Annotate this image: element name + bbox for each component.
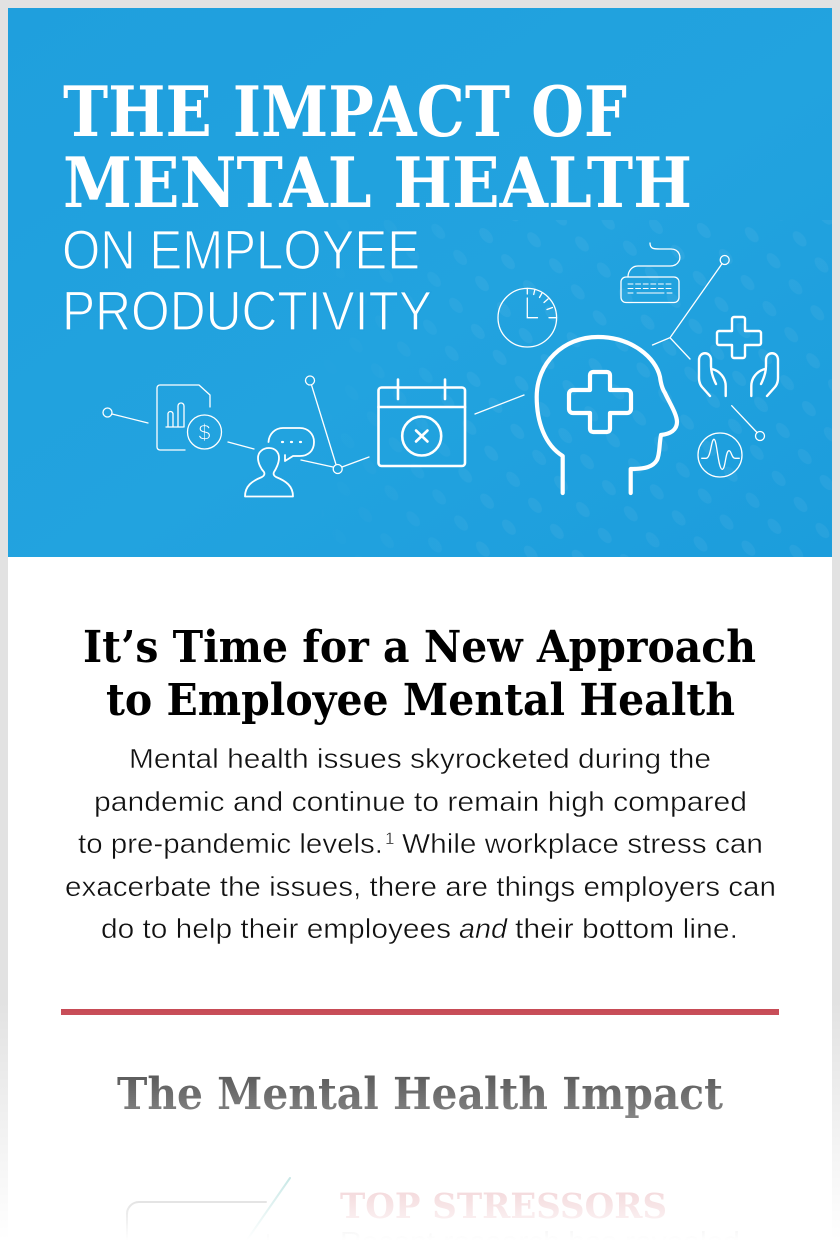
subtitle <box>62 218 432 342</box>
heading: new approach <box>83 622 756 726</box>
intro paragraph <box>65 743 776 944</box>
intro paragraph: While workplace stress can <box>402 828 763 859</box>
red divider <box>61 1009 779 1015</box>
top stressors icon <box>127 1178 290 1260</box>
connector lines and nodes, right <box>652 256 764 440</box>
heading: new approach: It’s Time for a New Approach <box>83 622 756 673</box>
subtitle: ON EMPLOYEE <box>62 218 420 281</box>
icon: document with chart and dollar coin: $ <box>198 420 211 445</box>
intro paragraph: their bottom line. <box>515 913 738 944</box>
icon: pulse in circle <box>698 433 742 477</box>
icon: clock <box>498 288 557 347</box>
header banner <box>8 8 832 557</box>
subtitle: PRODUCTIVITY <box>62 279 432 342</box>
top stressors heading: TOP STRESSORS <box>340 1186 667 1227</box>
icon: document with chart and dollar coin <box>157 385 222 450</box>
white fade overlay <box>0 1000 840 1240</box>
intro paragraph: do to help their employees <box>101 913 451 944</box>
icon: keyboard <box>621 243 680 302</box>
intro paragraph: exacerbate the issues, there are things employers can <box>65 871 776 902</box>
title: MENTAL HEALTH <box>63 143 692 224</box>
intro paragraph: and <box>459 913 508 944</box>
icon: hands holding plus <box>699 317 778 396</box>
intro paragraph: pandemic and continue to remain high compared <box>94 786 747 817</box>
heading: new approach: to Employee Mental Health <box>106 675 735 726</box>
title <box>63 72 692 224</box>
icon: calendar with x <box>378 380 465 466</box>
title: THE IMPACT OF <box>63 72 627 153</box>
intro paragraph: Mental health issues skyrocketed during the <box>129 743 711 774</box>
faded body text: Recent research has revealed <box>340 1226 740 1256</box>
heading: the mental health impact: The Mental Health Impact <box>117 1069 724 1120</box>
intro paragraph: to pre-pandemic levels. <box>78 828 383 859</box>
connector lines and nodes, left <box>103 376 369 474</box>
icon: person with speech bubble <box>245 428 314 496</box>
intro paragraph: 1 <box>385 829 394 848</box>
icon: head with medical cross <box>537 337 677 493</box>
connector: calendar to head <box>475 395 524 414</box>
